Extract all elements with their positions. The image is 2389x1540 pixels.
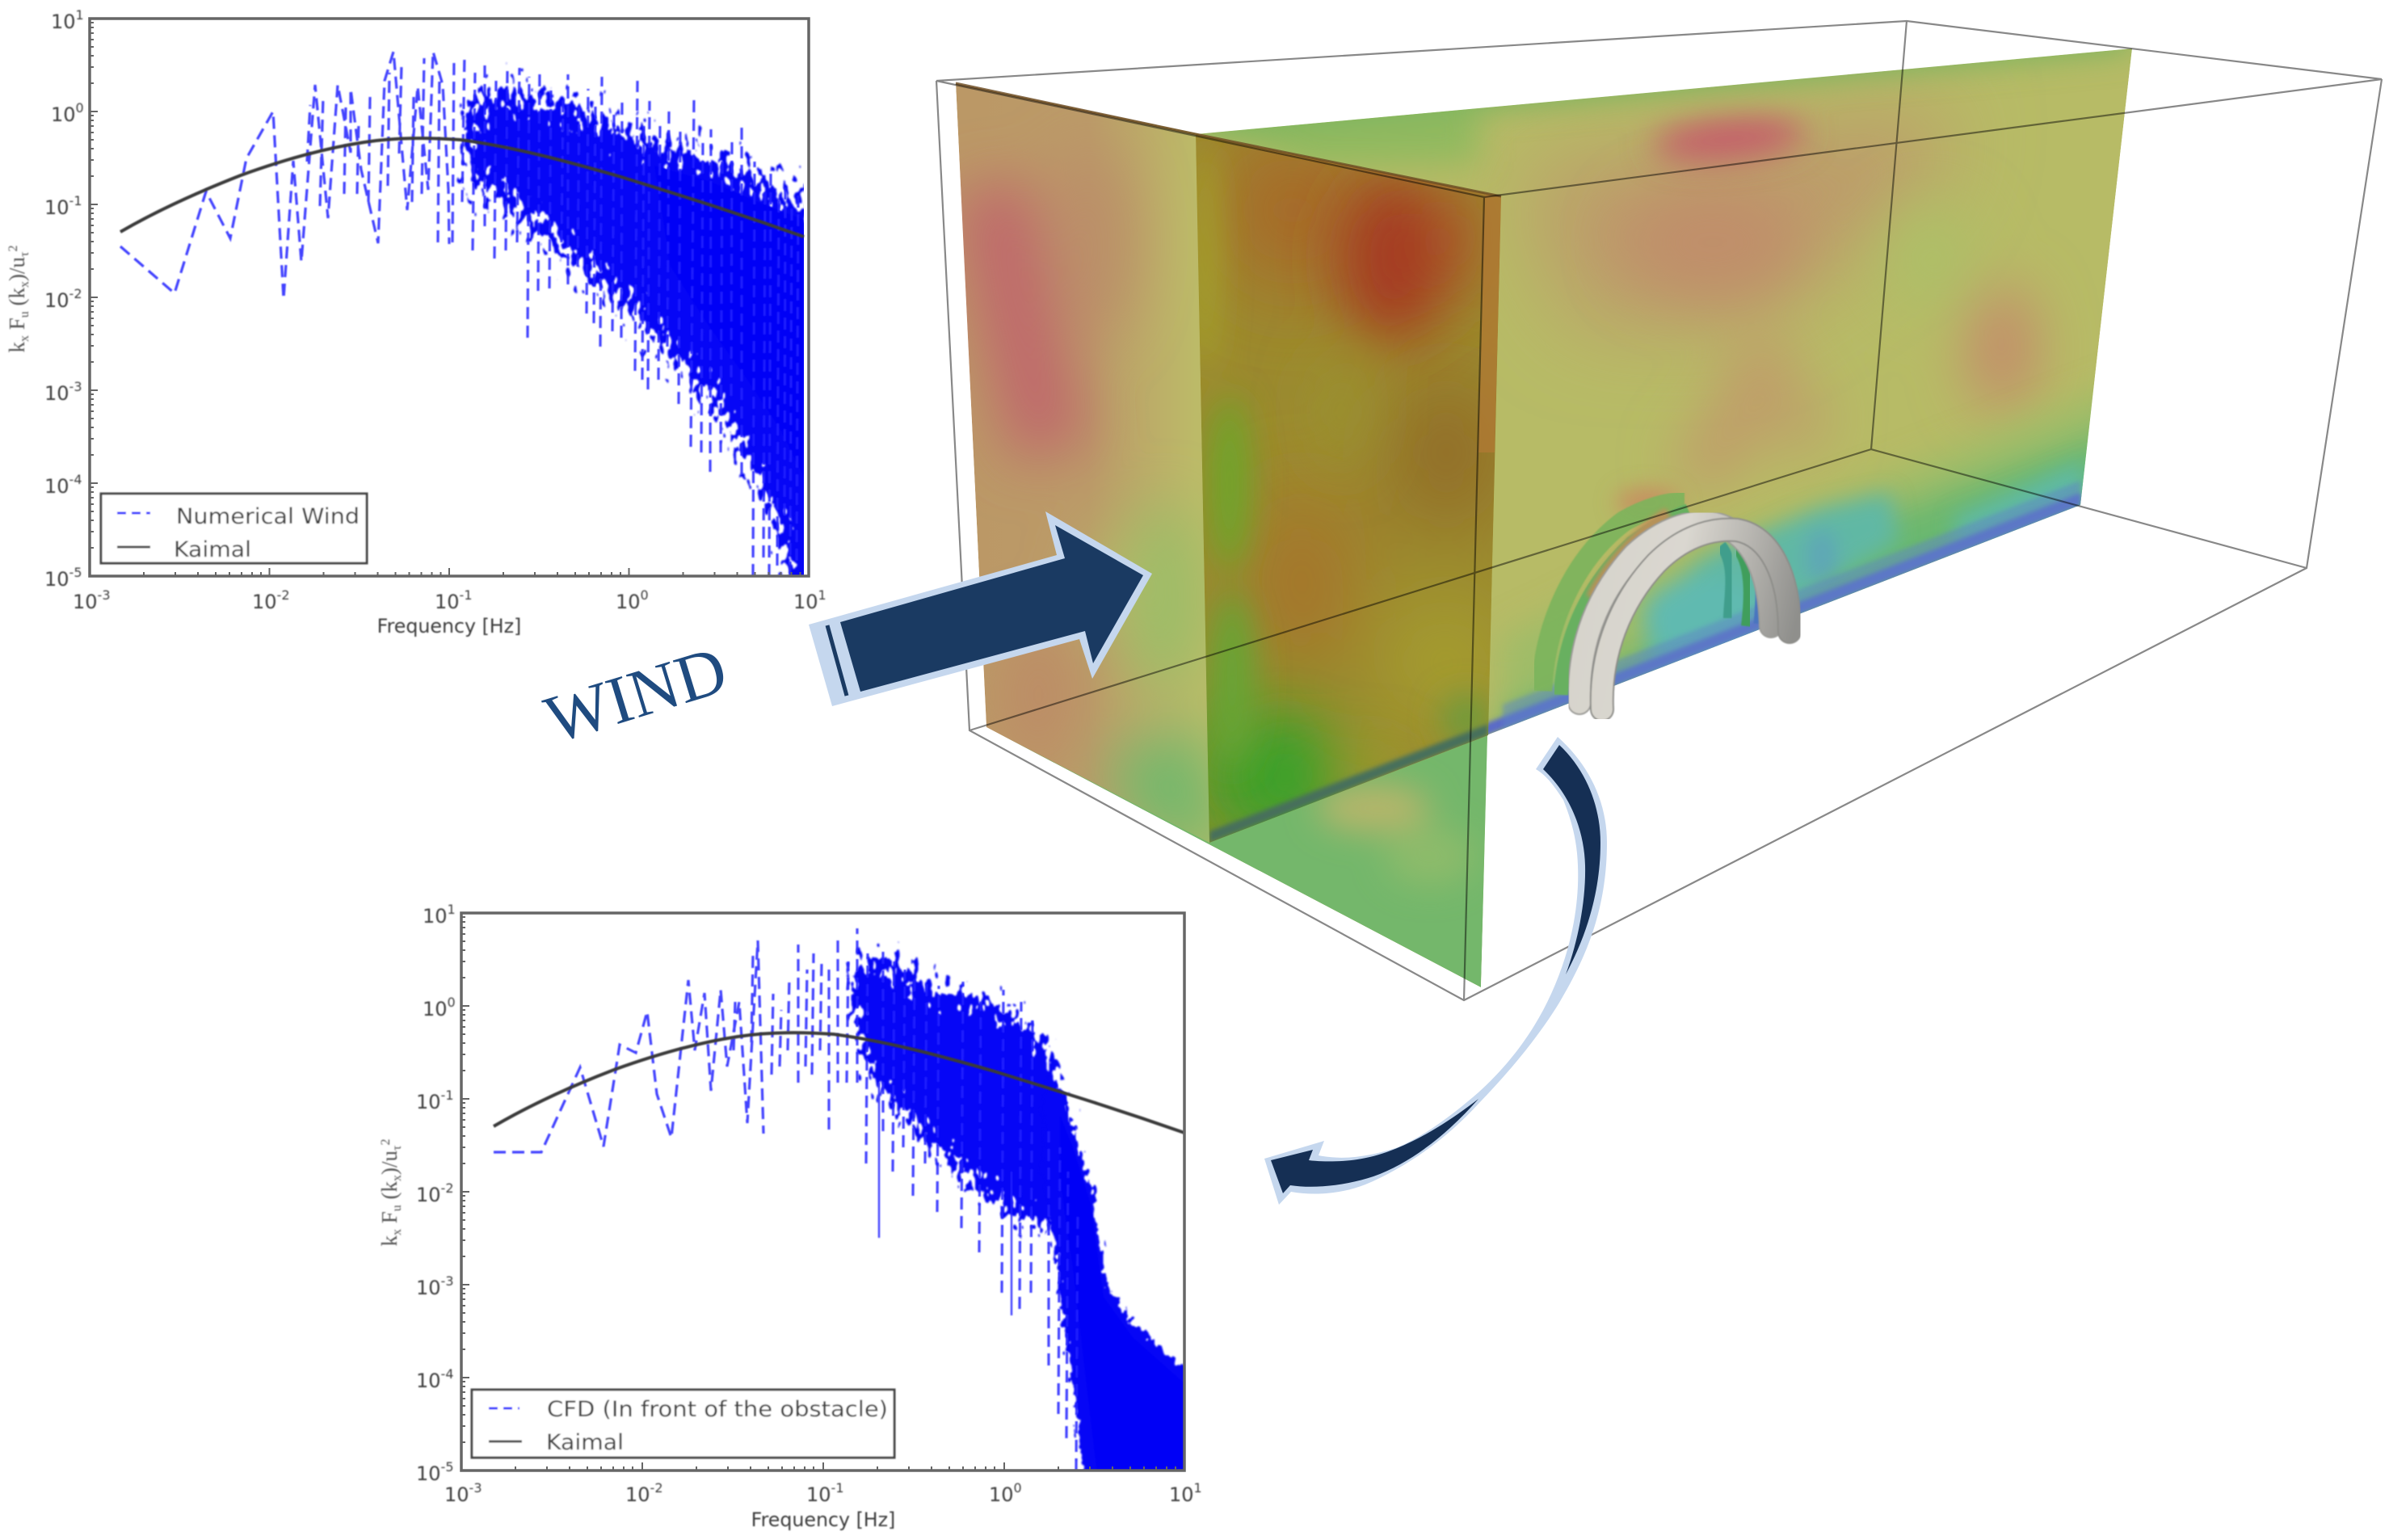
legend: Numerical Wind: [176, 504, 360, 529]
x axis title: Frequency [Hz]: [377, 615, 521, 637]
slice: back longitudinal plane: [1200, 48, 2132, 735]
y axis tick labels: -1: [69, 193, 82, 208]
y axis title: x: [18, 281, 32, 288]
y axis title: F: [5, 318, 29, 335]
legend: [472, 1390, 894, 1458]
legend: Kaimal: [546, 1430, 624, 1455]
slice top edge: [956, 83, 1501, 196]
y axis tick labels: 10: [44, 568, 69, 591]
chart: CFD in front of the obstacle spectrum: [377, 902, 1260, 1540]
y axis title: F: [377, 1211, 402, 1229]
y axis tick labels: 10: [416, 1277, 441, 1299]
x axis tick labels: -1: [831, 1480, 843, 1496]
x axis tick labels: 0: [1014, 1480, 1022, 1496]
y axis tick labels: -1: [441, 1088, 454, 1103]
y axis title: τ: [18, 251, 32, 257]
legend: [101, 494, 367, 563]
y axis tick labels: -5: [441, 1459, 454, 1475]
x axis tick labels: 10: [444, 1483, 469, 1506]
y axis title: (k: [5, 287, 29, 311]
y axis tick labels: 10: [44, 475, 69, 498]
y axis tick labels: 10: [416, 1462, 441, 1485]
y axis title: 2: [379, 1139, 393, 1146]
y axis tick labels: 10: [416, 1370, 441, 1392]
y axis title: u: [18, 311, 32, 318]
y axis tick labels: -5: [69, 565, 82, 580]
y axis tick labels: -4: [441, 1366, 454, 1382]
y axis title: x: [18, 335, 32, 342]
3D scene: CFD domain with velocity slices: [936, 16, 2382, 1000]
y axis tick labels: 10: [416, 1091, 441, 1113]
slice edge: right sliver of the near plane: [1478, 194, 1501, 452]
y axis tick labels: -2: [441, 1180, 454, 1196]
y axis title: τ: [390, 1145, 404, 1151]
y axis title: u: [390, 1205, 404, 1211]
x axis tick labels: 1: [818, 587, 826, 603]
y axis title: x: [390, 1229, 404, 1235]
obstacle: grey arch tubes: [1579, 523, 1790, 709]
y axis tick labels: 10: [44, 382, 69, 405]
y axis title: )/u: [5, 256, 29, 281]
y axis tick labels: -3: [69, 379, 82, 394]
legend: Kaimal: [174, 537, 251, 562]
y axis title: x: [390, 1175, 404, 1181]
x axis tick labels: 1: [1194, 1480, 1202, 1496]
x axis tick labels: 10: [73, 591, 98, 613]
y axis title: k: [377, 1235, 402, 1246]
y axis tick labels: 10: [44, 289, 69, 312]
y axis tick labels: [44, 7, 84, 591]
domain wireframe box: [936, 21, 2382, 1000]
arrow: wind direction: [809, 511, 1152, 706]
y axis tick labels: -4: [69, 472, 82, 487]
legend: CFD (In front of the obstacle): [547, 1397, 888, 1422]
x axis tick labels: -2: [277, 587, 289, 603]
slice overlap: darker region where the two planes cross: [1188, 129, 1503, 848]
x axis tick labels: [444, 1480, 1202, 1506]
y axis tick labels: 1: [448, 902, 456, 917]
x axis tick labels: -1: [460, 587, 472, 603]
x axis tick labels: 0: [641, 587, 649, 603]
arrow: curved arrow from obstacle to CFD chart: [1264, 737, 1607, 1205]
Kaimal reference curve: [120, 138, 804, 237]
CFD spectrum data: dense noise and dashed spikes: [493, 928, 1183, 1469]
y axis tick labels: 1: [76, 7, 84, 23]
y axis tick labels: 0: [76, 100, 84, 116]
x axis tick labels: 10: [1169, 1483, 1194, 1506]
x axis tick labels: 10: [435, 591, 460, 613]
y axis tick labels: 10: [416, 1184, 441, 1206]
y axis tick labels: 10: [51, 103, 76, 126]
Kaimal reference curve: [494, 1033, 1184, 1133]
slice: near transverse plane: [956, 83, 1501, 987]
y axis title: k: [5, 342, 29, 352]
x axis title: Frequency [Hz]: [751, 1508, 895, 1531]
axes frame with ticks: [90, 19, 809, 576]
y axis tick labels: 10: [423, 905, 448, 928]
y axis tick labels: 0: [448, 995, 456, 1010]
axes frame with ticks: [461, 913, 1184, 1471]
y axis tick labels: 10: [423, 998, 448, 1020]
y axis title: 2: [6, 246, 20, 252]
x axis tick labels: 10: [989, 1483, 1014, 1506]
x axis tick labels: 10: [616, 591, 641, 613]
x axis tick labels: 10: [625, 1483, 650, 1506]
y axis tick labels: [416, 902, 456, 1485]
y axis title: (k: [377, 1180, 402, 1205]
y axis tick labels: 10: [51, 11, 76, 33]
wind spectrum data: dense noise and dashed spikes: [119, 50, 804, 575]
y axis tick labels: 10: [44, 196, 69, 219]
obstacle: arch wake imprint: [1541, 503, 1759, 699]
x axis tick labels: -3: [98, 587, 110, 603]
x axis tick labels: -2: [650, 1480, 662, 1496]
y axis tick labels: -3: [441, 1273, 454, 1289]
x axis tick labels: [73, 587, 826, 613]
y axis title: )/u: [377, 1150, 402, 1175]
chart: numerical wind spectrum: [8, 9, 826, 638]
x axis tick labels: 10: [252, 591, 277, 613]
y axis tick labels: -2: [69, 286, 82, 301]
label: WIND: WIND: [536, 632, 735, 758]
x axis tick labels: 10: [793, 591, 818, 613]
x axis tick labels: -3: [469, 1480, 482, 1496]
x axis tick labels: 10: [806, 1483, 831, 1506]
